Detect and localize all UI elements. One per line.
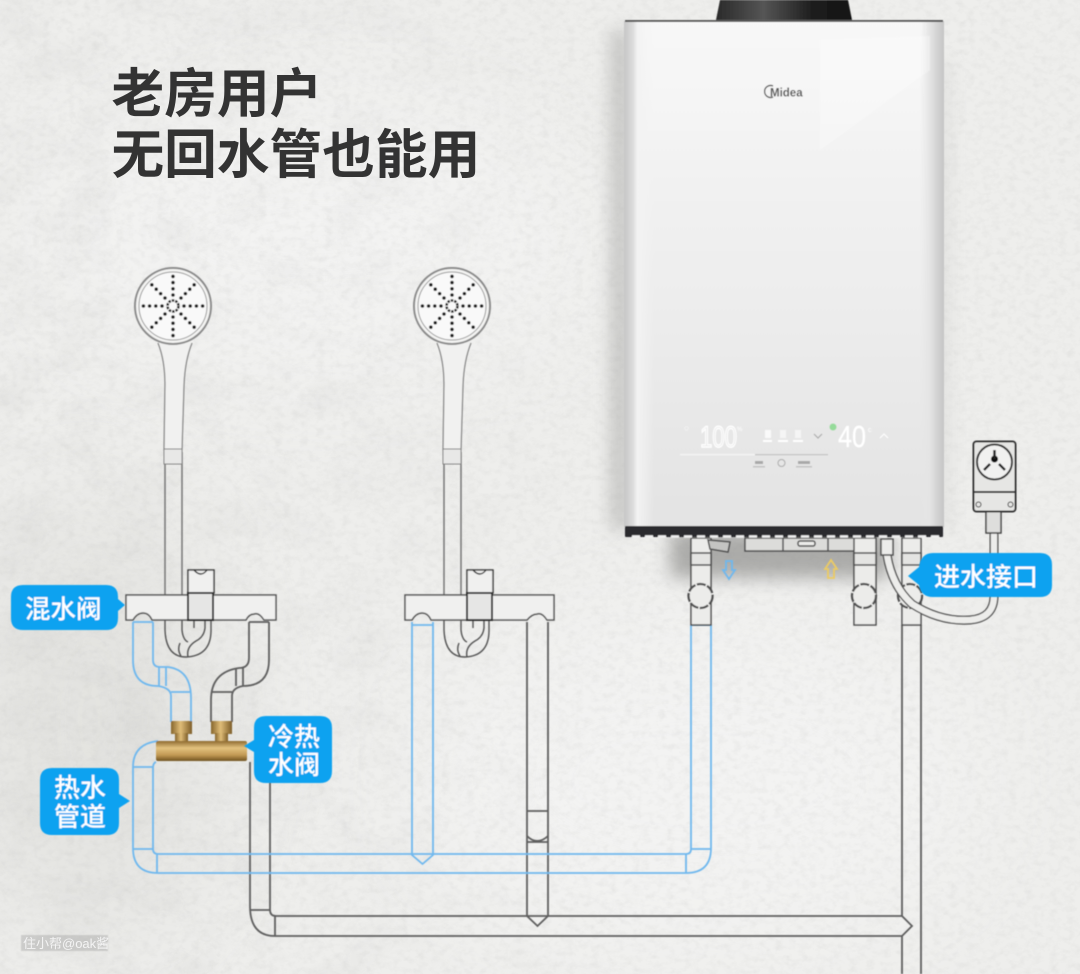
middle valve [852,538,876,625]
vent band [625,526,943,537]
brand logo: Midea [770,88,803,100]
mixer bar [405,595,554,620]
mixer centre valve [467,570,493,620]
watermark: 住小帮@oak酱 [23,936,109,951]
title: 老房用户 [112,65,322,124]
shower handle [158,343,192,450]
callout: mixing valve [11,585,125,630]
callout: cold hot valve: 水阀 [268,750,320,780]
outlet valve left [688,538,730,625]
shower set one [126,268,276,657]
display panel: c [868,427,872,434]
display panel: 100 [700,421,737,454]
riser pipe [444,452,461,595]
mixer centre valve [188,570,214,620]
mixer bar [126,595,276,620]
riser pipe [165,452,182,595]
water heater [624,20,944,537]
rear U bend [165,620,211,657]
grey branch pipe to second mixer [527,622,548,926]
shower handle [437,343,471,450]
flue top [716,0,852,20]
pipe network [133,622,921,974]
callout: cold hot valve: 冷热 [268,722,320,752]
blue branch pipe to second mixer [412,622,433,864]
callout: inlet connection: 进水接口 [934,562,1038,592]
power socket [974,442,1016,533]
callout: hot water pipe [40,768,130,835]
heater body [624,20,944,528]
title: 无回水管也能用 [112,126,480,185]
display panel: ○ [684,423,689,433]
brass cold hot valve [156,721,247,761]
callout: inlet connection [908,553,1052,597]
callout: mixing valve: 混水阀 [25,596,102,624]
water direction arrow: outlet [723,561,735,579]
bracket [745,538,855,551]
heater cast shadow on wall [612,30,948,578]
callout: hot water pipe: 热水 [54,773,106,803]
water direction arrow: inlet [825,560,837,578]
inlet valve right [898,538,922,625]
grey main cold water pipe [250,625,921,974]
title [112,65,480,185]
rear U bend [444,620,489,657]
callout: hot water pipe: 管道 [54,802,106,832]
callout: cold hot valve [244,716,332,783]
blue elbow from mixer one to brass valve [133,622,191,722]
blue hot water pipe [133,625,711,873]
display panel: 40 [838,419,866,454]
grey elbow from mixer one to brass valve [211,622,269,722]
shower set two [405,268,554,657]
under heater fittings [688,538,922,625]
shower head [135,268,211,344]
shower head [414,268,490,344]
display panel: % [737,427,743,433]
display panel [680,419,888,468]
power cable [881,535,994,620]
